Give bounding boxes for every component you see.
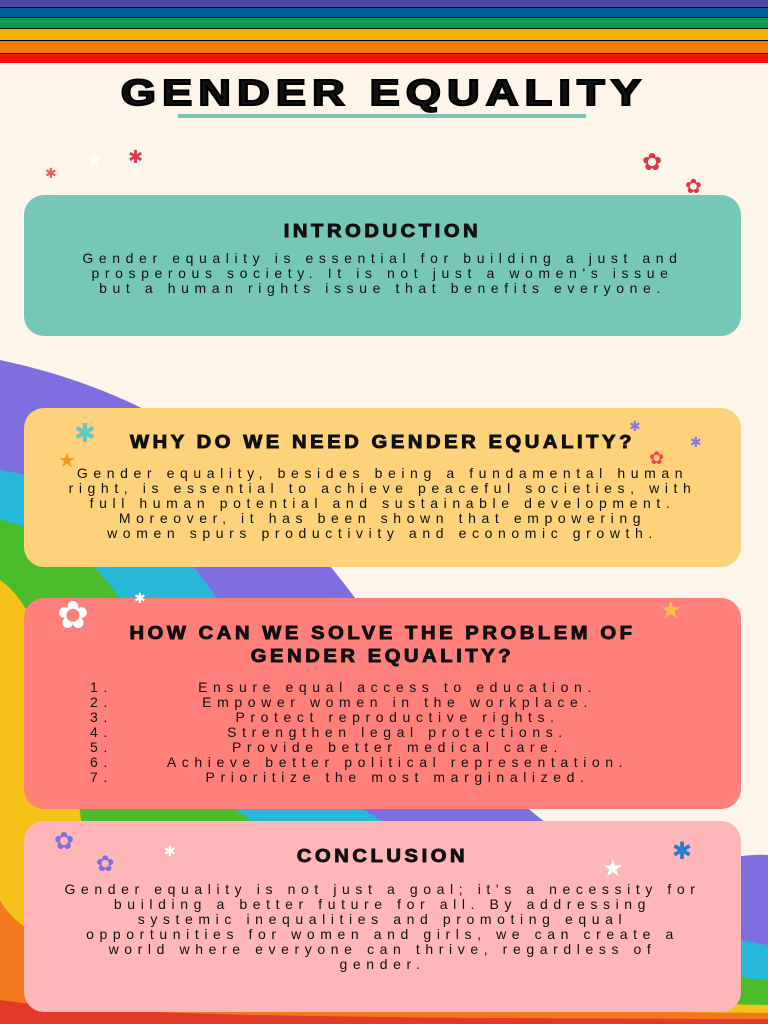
text: introduction: but a human rights issue that benefits everyone. (99, 280, 666, 296)
text: why: women spurs productivity and economic growth. (107, 525, 658, 541)
list: solutions: Empower women in the workplace. (202, 694, 593, 710)
panel: conclusion: ★ (602, 855, 624, 882)
heading: how: GENDER EQUALITY? (251, 646, 514, 666)
text: introduction: prosperous society. It is not just a women's issue (92, 265, 674, 281)
text: conclusion: opportunities for women and girls, we can create a (86, 926, 679, 942)
panel: conclusion: ✱ (672, 838, 692, 865)
heading: why: WHY DO WE NEED GENDER EQUALITY? (130, 432, 635, 452)
panel: how: ✱ (134, 590, 146, 606)
heading: introduction: INTRODUCTION (284, 221, 481, 241)
text: why (69, 465, 696, 541)
title underline (178, 114, 586, 118)
decorations top: ★ (85, 149, 103, 171)
list: solutions (90, 679, 628, 785)
panel: why: ✿ (649, 448, 664, 468)
panel: how: ✿ (57, 595, 89, 637)
list: solutions: 3. (90, 709, 113, 725)
panel: why: ✱ (690, 434, 702, 450)
list: solutions: 7. (90, 769, 113, 785)
text: introduction (82, 250, 683, 296)
list: solutions: Ensure equal access to education. (198, 679, 597, 695)
text: conclusion: Gender equality is not just a goal; it's a necessity for (64, 881, 701, 897)
panel: why (24, 408, 741, 567)
text: conclusion: world where everyone can thrive, regardless of (109, 941, 656, 957)
panel: why: ★ (58, 450, 76, 472)
panel: conclusion (24, 821, 741, 1012)
heading: how (129, 623, 636, 666)
list: solutions: 2. (90, 694, 113, 710)
decorations top: ✿ (642, 149, 662, 176)
rainbow stripes header (0, 0, 768, 63)
list: solutions: 1. (90, 679, 113, 695)
list: solutions: Strengthen legal protections. (227, 724, 568, 740)
text: conclusion: building a better future for all. By addressing (114, 896, 651, 912)
text: why: Gender equality, besides being a fundamental human (77, 465, 688, 481)
heading: conclusion: CONCLUSION (297, 846, 468, 866)
text: conclusion: systemic inequalities and promoting equal (138, 911, 627, 927)
panel: introduction (24, 195, 741, 336)
list: solutions: Protect reproductive rights. (235, 709, 560, 725)
text: introduction: Gender equality is essential for building a just and (82, 250, 683, 266)
list: solutions: Provide better medical care. (232, 739, 563, 755)
text: conclusion: gender. (340, 956, 425, 972)
text: why: full human potential and sustainable development. (90, 495, 675, 511)
panel: why: ✱ (74, 418, 96, 448)
text: why: Moreover, it has been shown that empowering (119, 510, 646, 526)
list: solutions: Achieve better political representation. (167, 754, 628, 770)
panel: conclusion: ✱ (164, 843, 176, 859)
panel: how: ★ (660, 597, 682, 624)
list: solutions: Prioritize the most marginalized. (206, 769, 590, 785)
decorations top: ✱ (128, 147, 143, 167)
decorations top: ✱ (45, 165, 57, 181)
panel: why: ✱ (629, 418, 641, 434)
list: solutions: 4. (90, 724, 113, 740)
decorations top: ✿ (685, 176, 702, 198)
panel: how (24, 598, 741, 809)
decorations top (45, 147, 702, 198)
panel: conclusion: ✿ (96, 851, 114, 876)
text: conclusion (64, 881, 701, 972)
list: solutions: 6. (90, 754, 113, 770)
title: GENDER EQUALITY (121, 72, 647, 113)
panel: conclusion: ✿ (54, 828, 74, 855)
list: solutions: 5. (90, 739, 113, 755)
heading: how: HOW CAN WE SOLVE THE PROBLEM OF (129, 623, 636, 643)
text: why: right, is essential to achieve peaceful societies, with (69, 480, 696, 496)
